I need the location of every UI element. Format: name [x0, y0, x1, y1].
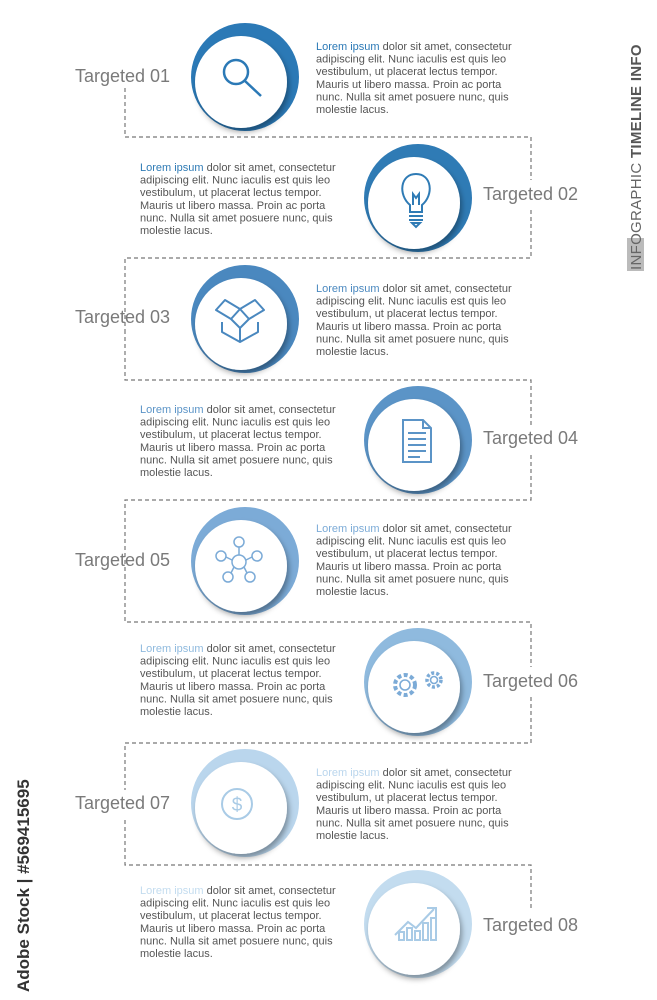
label 01: Targeted 01 — [75, 66, 170, 86]
step 02: Targeted 02 — [483, 184, 578, 204]
icon: search — [224, 60, 261, 96]
step 05: vestibulum, ut placerat lectus tempor. — [316, 548, 498, 560]
step 06: adipiscing elit. Nunc iaculis est quis leo — [140, 656, 330, 668]
icon: box — [216, 300, 264, 342]
step 06: molestie lacus. — [140, 706, 213, 718]
step 08: adipiscing elit. Nunc iaculis est quis leo — [140, 898, 330, 910]
step 03: Lorem ipsum dolor sit amet, consectetur — [316, 283, 512, 295]
step 05 — [75, 507, 512, 615]
step 08: vestibulum, ut placerat lectus tempor. — [140, 910, 322, 922]
step 08: nunc. Nulla sit amet posuere nunc, quis — [140, 935, 333, 947]
step 07: adipiscing elit. Nunc iaculis est quis leo — [316, 780, 506, 792]
step 06 — [140, 628, 578, 736]
step 02: nunc. Nulla sit amet posuere nunc, quis — [140, 212, 333, 224]
step 06: vestibulum, ut placerat lectus tempor. — [140, 668, 322, 680]
step 08: Targeted 08 — [483, 915, 578, 935]
step 06: Lorem ipsum dolor sit amet, consectetur — [140, 643, 336, 655]
step 04: vestibulum, ut placerat lectus tempor. — [140, 429, 322, 441]
step 07: Lorem ipsum dolor sit amet, consectetur — [316, 767, 512, 779]
step 05: nunc. Nulla sit amet posuere nunc, quis — [316, 573, 509, 585]
step 03: Targeted 03 — [75, 307, 170, 327]
vertical title: INFOGRAPHIC TIMELINE INFO — [628, 44, 645, 270]
step 04 — [140, 386, 578, 494]
step 08 — [140, 870, 578, 978]
step 06: Targeted 06 — [483, 671, 578, 691]
text 01: vestibulum, ut placerat lectus tempor. — [316, 66, 498, 78]
step 03 — [75, 265, 512, 373]
step 04: adipiscing elit. Nunc iaculis est quis leo — [140, 417, 330, 429]
step 02: vestibulum, ut placerat lectus tempor. — [140, 187, 322, 199]
step 05: Lorem ipsum dolor sit amet, consectetur — [316, 523, 512, 535]
step 03: adipiscing elit. Nunc iaculis est quis leo — [316, 296, 506, 308]
icon: dollar: $ — [232, 795, 243, 816]
step 01 — [75, 23, 512, 131]
step 02: adipiscing elit. Nunc iaculis est quis leo — [140, 175, 330, 187]
step 03: molestie lacus. — [316, 346, 389, 358]
step 07: Mauris ut libero massa. Proin ac porta — [316, 805, 502, 817]
text 01: nunc. Nulla sit amet posuere nunc, quis — [316, 91, 509, 103]
step 02: Mauris ut libero massa. Proin ac porta — [140, 200, 326, 212]
step 02: Lorem ipsum dolor sit amet, consectetur — [140, 162, 336, 174]
icon: gears — [395, 673, 441, 695]
step 07: nunc. Nulla sit amet posuere nunc, quis — [316, 817, 509, 829]
step 07 — [75, 749, 512, 857]
text 01: Mauris ut libero massa. Proin ac porta — [316, 79, 502, 91]
step 05: Mauris ut libero massa. Proin ac porta — [316, 561, 502, 573]
icon: growth chart — [395, 908, 436, 940]
icon: bulb — [402, 174, 430, 227]
step 07: Targeted 07 — [75, 793, 170, 813]
step 04: nunc. Nulla sit amet posuere nunc, quis — [140, 454, 333, 466]
step 07: molestie lacus. — [316, 830, 389, 842]
step 07: vestibulum, ut placerat lectus tempor. — [316, 792, 498, 804]
step 04: Targeted 04 — [483, 428, 578, 448]
step 06: Mauris ut libero massa. Proin ac porta — [140, 681, 326, 693]
step 05: molestie lacus. — [316, 586, 389, 598]
step 08: molestie lacus. — [140, 948, 213, 960]
step 06: nunc. Nulla sit amet posuere nunc, quis — [140, 693, 333, 705]
step 08: Lorem ipsum dolor sit amet, consectetur — [140, 885, 336, 897]
step 03: Mauris ut libero massa. Proin ac porta — [316, 321, 502, 333]
step 05: Targeted 05 — [75, 550, 170, 570]
step 03: nunc. Nulla sit amet posuere nunc, quis — [316, 333, 509, 345]
watermark: Adobe Stock | #569415695 — [14, 779, 33, 992]
step 03: vestibulum, ut placerat lectus tempor. — [316, 308, 498, 320]
text 01: Lorem ipsum dolor sit amet, consectetur — [316, 41, 512, 53]
step 04: Lorem ipsum dolor sit amet, consectetur — [140, 404, 336, 416]
icon: document — [403, 420, 431, 462]
step 08: Mauris ut libero massa. Proin ac porta — [140, 923, 326, 935]
step 04: molestie lacus. — [140, 467, 213, 479]
connector lines — [125, 88, 531, 910]
step 02: molestie lacus. — [140, 225, 213, 237]
text 01: adipiscing elit. Nunc iaculis est quis leo — [316, 54, 506, 66]
icon: dollar — [222, 789, 252, 819]
text 01: molestie lacus. — [316, 104, 389, 116]
step 04: Mauris ut libero massa. Proin ac porta — [140, 442, 326, 454]
step 05: adipiscing elit. Nunc iaculis est quis leo — [316, 536, 506, 548]
step 02 — [140, 144, 578, 252]
icon: network — [216, 537, 262, 582]
